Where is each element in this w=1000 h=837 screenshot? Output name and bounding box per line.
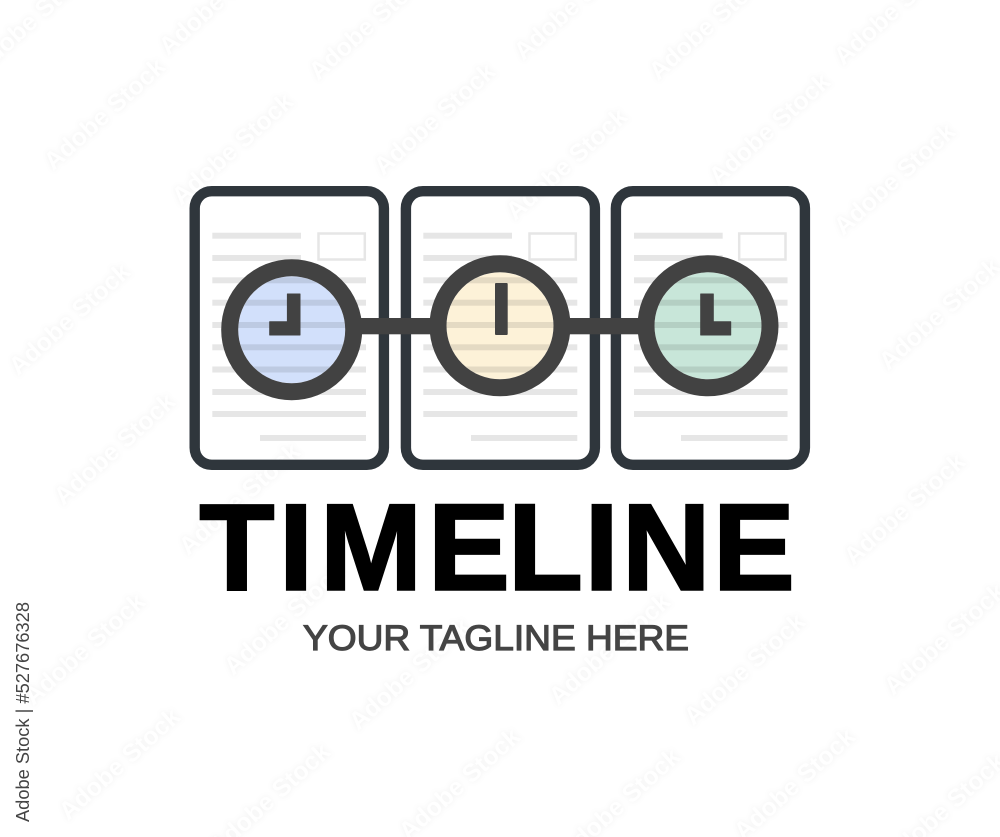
icon: clock 2 yellow (438, 264, 562, 388)
timeline connector (355, 318, 643, 334)
panel: document card 3 (616, 191, 805, 465)
stock id label: Adobe Stock | #527676328 (12, 602, 33, 822)
watermark pattern: Adobe Stock (829, 117, 961, 241)
watermark pattern: Adobe Stock (174, 437, 306, 561)
tagline: YOUR TAGLINE HERE (303, 619, 689, 658)
watermark pattern: Adobe Stock (219, 557, 351, 681)
icon: clock 1 blue (230, 268, 354, 392)
watermark pattern: Adobe Stock (49, 387, 181, 511)
watermark pattern: Adobe Stock (679, 607, 811, 731)
watermark pattern: Adobe Stock (344, 612, 476, 736)
watermark pattern: Adobe Stock (19, 587, 151, 711)
watermark pattern: Adobe Stock (167, 87, 299, 211)
watermark pattern: Adobe Stock (704, 67, 836, 191)
watermark pattern: Adobe Stock (544, 587, 676, 711)
watermark pattern: Adobe Stock (839, 447, 971, 571)
icon: clock 3 green (646, 264, 770, 388)
title: TIMELINE (200, 478, 795, 616)
watermark pattern: Adobe Stock (369, 57, 501, 181)
watermark pattern: Adobe Stock (4, 257, 136, 381)
panel: document card 1 (195, 191, 384, 465)
watermark pattern: Adobe Stock (501, 102, 633, 226)
panel: document card 2 (406, 191, 595, 465)
watermark pattern: Adobe Stock (39, 52, 171, 176)
watermark pattern: Adobe Stock (54, 702, 186, 826)
